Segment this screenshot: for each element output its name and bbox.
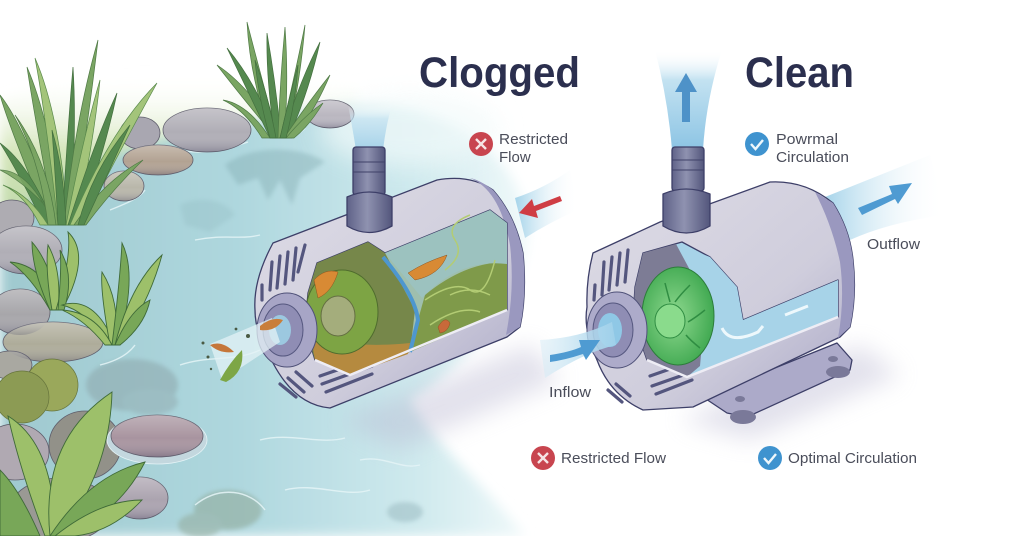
end cap band — [470, 178, 524, 335]
dark chamber — [633, 244, 706, 377]
clogged impeller — [306, 270, 378, 354]
icon: blue check — [758, 446, 782, 470]
clean pump — [540, 50, 945, 424]
pump body — [255, 178, 524, 408]
green impeller — [642, 267, 714, 365]
callout: restricted flow: Restricted — [499, 131, 568, 148]
flow ribbon: blocked outlet — [515, 170, 578, 238]
inlet flow with debris — [202, 318, 283, 382]
inflow ribbon — [540, 322, 616, 378]
callout: restricted flow — [469, 131, 568, 166]
icon: blue check — [745, 132, 769, 156]
pale water highlight — [320, 94, 500, 166]
flow arrows in channel — [722, 306, 808, 338]
callout: restricted flow: Flow — [499, 149, 531, 166]
heading: Clean: Clean — [745, 49, 854, 97]
impeller chamber clogged — [305, 242, 415, 375]
pump body — [586, 182, 854, 410]
outlet stem — [663, 147, 710, 233]
mid leafy plants — [10, 232, 162, 345]
clogged pump — [202, 105, 578, 408]
submerged stones — [86, 359, 423, 536]
legend: restricted flow — [531, 446, 666, 470]
window lower rim — [315, 310, 507, 375]
pond water — [0, 106, 528, 536]
outlet stem — [347, 147, 392, 232]
label: inflow: Inflow — [549, 384, 591, 401]
cutaway window — [633, 242, 838, 377]
water ripples — [100, 125, 420, 510]
callout: powrmal circulation — [745, 131, 849, 166]
icon: outflow arrow — [858, 183, 912, 215]
grass clump: back — [217, 22, 330, 138]
label: outflow: Outflow — [867, 236, 920, 253]
inlet hub — [587, 292, 647, 368]
grassy bank — [0, 74, 360, 230]
plant reflection — [180, 150, 325, 232]
icon: red cross — [469, 132, 493, 156]
water channel — [682, 246, 838, 370]
grass clump: large — [0, 40, 157, 225]
water jet — [655, 50, 722, 150]
rock shading — [0, 100, 354, 519]
impeller hub — [321, 296, 355, 336]
icon: red blocked-flow arrow — [519, 196, 562, 218]
end cap band — [815, 192, 854, 338]
water jet: weak — [348, 105, 392, 150]
icon: red cross — [531, 446, 555, 470]
debris mound — [310, 330, 410, 375]
icon: inflow arrow — [550, 340, 600, 362]
window lower rim — [647, 317, 838, 377]
callout: powrmal circulation: Circulation — [776, 149, 849, 166]
cutaway window — [305, 210, 507, 375]
outflow ribbon — [825, 155, 945, 240]
heading: Clogged: Clogged — [419, 49, 580, 97]
legend: optimal circulation: Optimal Circulation — [788, 450, 917, 467]
vents — [594, 250, 692, 402]
moss rocks — [0, 359, 78, 423]
inlet hub — [257, 293, 317, 367]
legend: restricted flow: Restricted Flow — [561, 450, 666, 467]
algae strands — [425, 215, 495, 325]
rocks — [0, 100, 354, 536]
leaves in chamber — [314, 255, 450, 333]
seal ring — [383, 257, 418, 352]
icon: up arrow — [675, 73, 697, 122]
pump shadows — [340, 345, 900, 450]
base plate — [703, 343, 852, 424]
vents — [262, 245, 372, 397]
chamber: water and algae — [410, 262, 507, 352]
pond scene — [0, 22, 528, 536]
callout: powrmal circulation: Powrmal — [776, 131, 838, 148]
foreground broad leaves — [0, 392, 145, 536]
legend: optimal circulation — [758, 446, 917, 470]
